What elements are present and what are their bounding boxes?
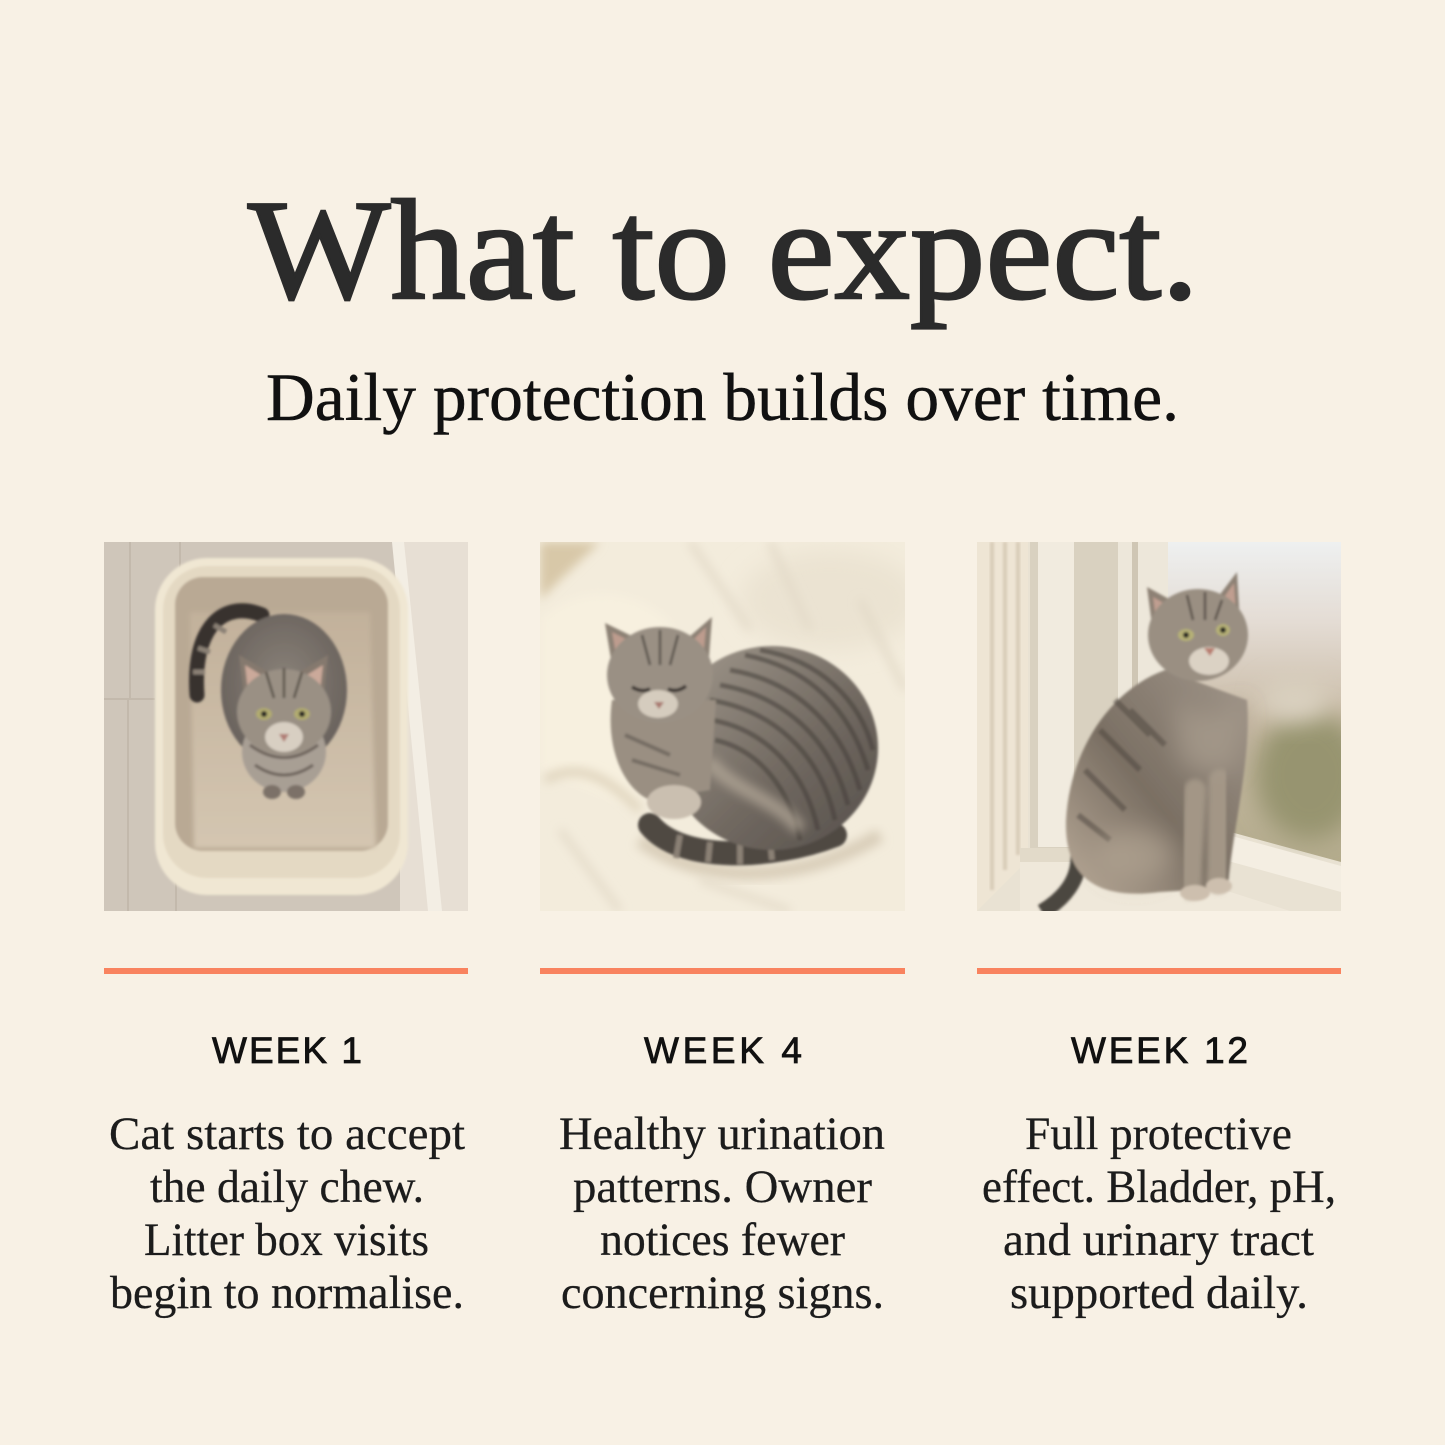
window frame [1231, 837, 1341, 892]
text block: week 1: Litter box visits [144, 1214, 429, 1266]
cat [193, 611, 347, 799]
panel: week 1 photo, cat in litter box [104, 542, 468, 911]
cat [605, 617, 878, 864]
text block: week 1: begin to normalise. [110, 1267, 464, 1319]
text block: week 12: Full protective [1025, 1108, 1292, 1160]
cat [1042, 572, 1248, 912]
text block: week 12: effect. Bladder, pH, [982, 1161, 1336, 1213]
text block: week 12 [982, 1108, 1336, 1319]
label: week 1: WEEK 1 [212, 1030, 362, 1071]
panel: week 12 photo, cat on windowsill [977, 542, 1365, 912]
text block: week 4: notices fewer [600, 1214, 845, 1266]
text block: week 12: and urinary tract [1003, 1214, 1314, 1266]
label: week 4: WEEK 4 [644, 1030, 802, 1071]
text block: week 1 [109, 1108, 465, 1319]
text block: week 4: patterns. Owner [573, 1161, 872, 1213]
window view [1168, 542, 1341, 862]
text block: week 1: Cat starts to accept [109, 1108, 465, 1160]
subtitle: Daily protection builds over time. [266, 359, 1179, 435]
title: What to expect. [248, 171, 1199, 329]
text block: week 1: the daily chew. [150, 1161, 424, 1213]
litter box [155, 558, 408, 895]
coral divider: week 4 [540, 968, 905, 974]
coral divider: week 12 [977, 968, 1341, 974]
curtain [977, 542, 1028, 911]
text block: week 4: Healthy urination [559, 1108, 885, 1160]
label: week 12: WEEK 12 [1071, 1030, 1248, 1071]
text block: week 12: supported daily. [1010, 1267, 1308, 1319]
coral divider: week 1 [104, 968, 468, 974]
text block: week 4 [559, 1108, 885, 1319]
text block: week 4: concerning signs. [561, 1267, 884, 1319]
panel: week 4 photo, cat curled on blanket [540, 542, 920, 911]
